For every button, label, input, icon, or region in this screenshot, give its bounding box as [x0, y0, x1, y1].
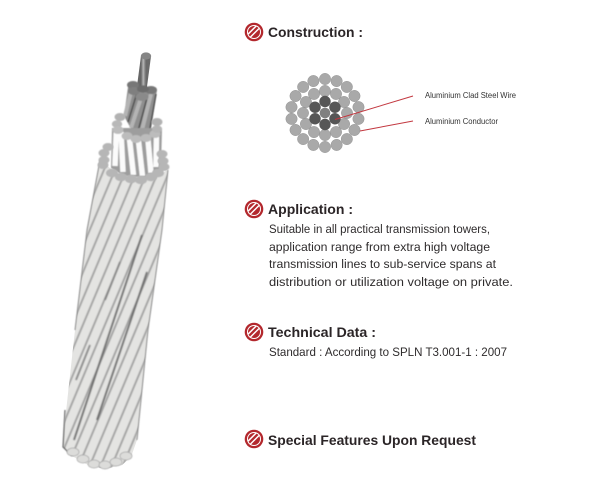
icon: application bullet — [245, 200, 263, 218]
bottom strand ends — [67, 448, 132, 469]
application description: distribution or utilization voltage on private. — [269, 275, 513, 289]
steel core wires — [307, 96, 343, 130]
icon: technical data bullet — [245, 323, 263, 341]
callout line: steel wire — [335, 96, 413, 120]
illustration: stranded cable — [62, 52, 170, 470]
label: steel wire: Aluminium Clad Steel Wire — [425, 91, 517, 100]
outer aluminium ring — [285, 73, 365, 153]
cross-section diagram — [285, 73, 517, 153]
technical standard text: Standard : According to SPLN T3.001-1 : 2007 — [269, 345, 507, 359]
middle aluminium strands — [111, 113, 162, 178]
inner steel strands — [124, 81, 157, 136]
outer strand end caps — [98, 143, 170, 184]
callout line: conductor — [360, 121, 413, 131]
label: conductor: Aluminium Conductor — [425, 117, 498, 126]
application description — [269, 222, 513, 289]
icon: construction bullet — [245, 23, 263, 41]
heading: application: Application : — [268, 201, 353, 217]
icon: special features bullet — [245, 430, 263, 448]
cable core steel wire — [141, 52, 151, 94]
middle aluminium ring — [297, 85, 353, 141]
application description: transmission lines to sub-service spans at — [269, 257, 497, 271]
application description: Suitable in all practical transmission towers, — [269, 222, 490, 236]
application description: application range from extra high voltage — [269, 240, 490, 254]
heading: technical data: Technical Data : — [268, 324, 376, 340]
outer aluminium layer body — [62, 160, 169, 468]
heading: special features: Special Features Upon Request — [268, 432, 476, 448]
heading: construction: Construction : — [268, 24, 363, 40]
